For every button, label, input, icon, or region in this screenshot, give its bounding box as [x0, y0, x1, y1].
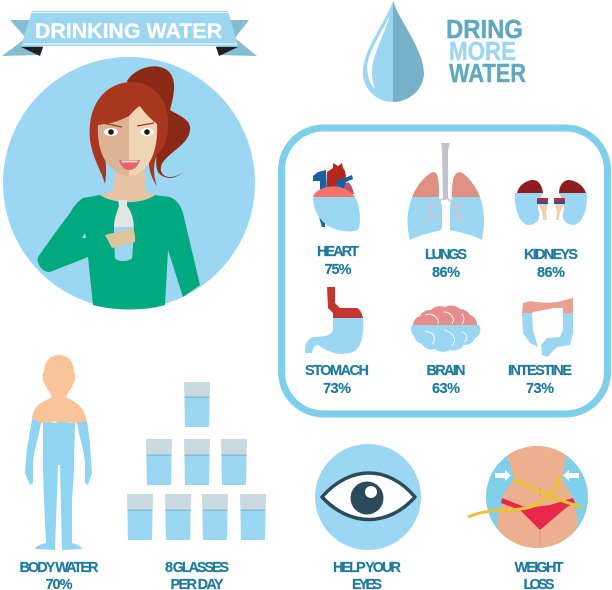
weight label: WEIGHT: [514, 560, 564, 576]
measuring tape: [468, 477, 582, 517]
glass 6: [165, 494, 191, 540]
shirt: [38, 195, 200, 310]
title banner: [2, 11, 257, 56]
mouth: [119, 160, 140, 170]
stomach value: 73%: [323, 381, 351, 397]
kidneys label: KIDNEYS: [524, 247, 578, 263]
kidneys value: 86%: [537, 265, 565, 281]
heading: dring more water: WATER: [449, 60, 526, 88]
panel: organs: [282, 128, 608, 414]
eye label: HELP YOUR: [333, 560, 402, 576]
woman drinking water illustration: [3, 57, 255, 310]
navel line: [539, 488, 541, 548]
hand: [105, 228, 135, 248]
brain: [411, 305, 480, 352]
intestine label: INTESTINE: [508, 363, 572, 379]
brain value: 63%: [432, 381, 460, 397]
ponytail: [127, 66, 190, 178]
heart: [313, 163, 360, 232]
heading: dring more water: DRING: [446, 16, 523, 44]
lungs label: LUNGS: [425, 247, 467, 263]
face: [98, 116, 129, 176]
arrows: [495, 470, 511, 481]
glass 1: [184, 382, 210, 427]
eight glasses: [127, 382, 266, 540]
lungs value: 86%: [432, 265, 460, 281]
neck: [100, 165, 155, 202]
intestine value: 73%: [526, 381, 554, 397]
heading: dring more water: MORE: [449, 38, 516, 66]
intestine: [522, 298, 573, 357]
weight loss icon: [468, 440, 588, 550]
glasses label: 8 GLASSES: [165, 560, 229, 576]
glass 5: [127, 494, 153, 540]
heart label: HEART: [317, 244, 359, 260]
lungs: [408, 143, 484, 240]
bottle: [114, 200, 134, 261]
glass 7: [202, 494, 228, 540]
eye icon: [315, 444, 421, 550]
eyes: [104, 128, 118, 136]
heading: dring more water: [446, 16, 526, 88]
heart value: 75%: [324, 262, 352, 278]
brain label: BRAIN: [426, 363, 466, 379]
glass 2: [146, 439, 172, 485]
stomach label: STOMACH: [305, 363, 369, 379]
water drop icon: [363, 1, 424, 102]
hair front: [90, 82, 168, 186]
glass 8: [240, 494, 266, 540]
glass 3: [184, 439, 210, 485]
stomach: [305, 287, 363, 354]
body water figure: [25, 355, 92, 550]
kidneys: [515, 180, 587, 225]
glass 4: [221, 439, 247, 485]
bikini: [501, 498, 575, 530]
body water label: BODY WATER: [20, 560, 99, 576]
title text: DRINKING WATER: [35, 19, 222, 43]
